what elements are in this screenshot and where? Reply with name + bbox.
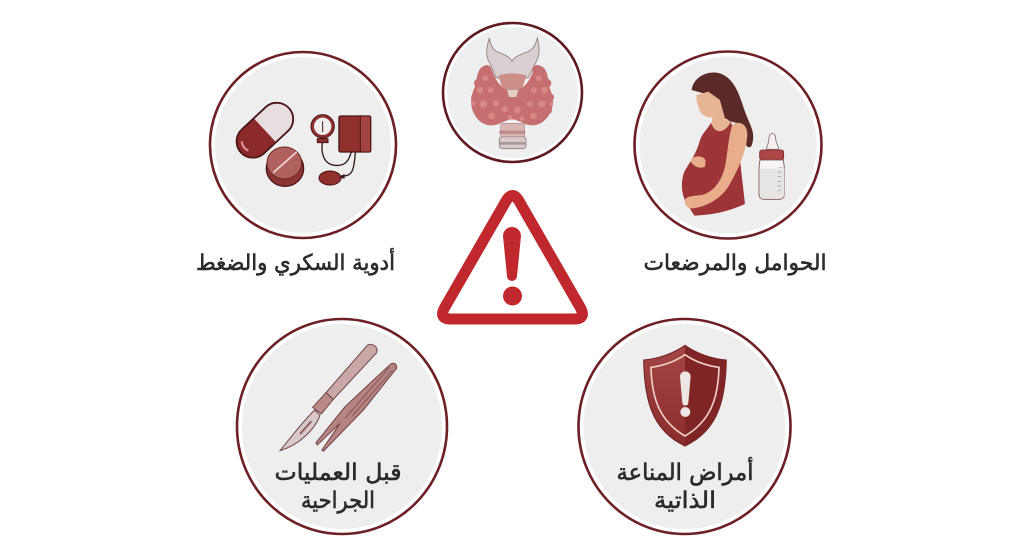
icon: blood pressure cuff and gauge [311,115,371,185]
label: autoimmune [616,457,754,514]
icon: tablet [266,150,304,186]
panel: thyroid gland [443,23,582,162]
label: surgery [274,460,402,514]
icon: capsule [230,96,304,186]
icon: thyroid [471,38,554,149]
icon: central warning triangle [443,196,582,319]
panel: autoimmune diseases [578,319,790,534]
icon: pregnant woman [682,72,753,216]
heading: medication label: أدوية السكري والضغط [196,248,395,276]
panel: pregnant and breastfeeding women [634,52,822,238]
icon: baby bottle [759,133,784,199]
panel: before surgery [237,319,447,534]
label: surgery: الجراحية [301,488,375,514]
label: autoimmune: الذاتية [654,488,716,514]
icon: shield with exclamation [644,345,726,446]
label: surgery: قبل العمليات [274,460,402,486]
heading: pregnancy label: الحوامل والمرضعات [644,251,826,276]
icon: tweezers [316,363,397,451]
icon: scalpel [280,344,377,451]
label: autoimmune: أمراض المناعة [616,457,754,486]
panel: blood pressure and diabetes medication [210,52,396,238]
